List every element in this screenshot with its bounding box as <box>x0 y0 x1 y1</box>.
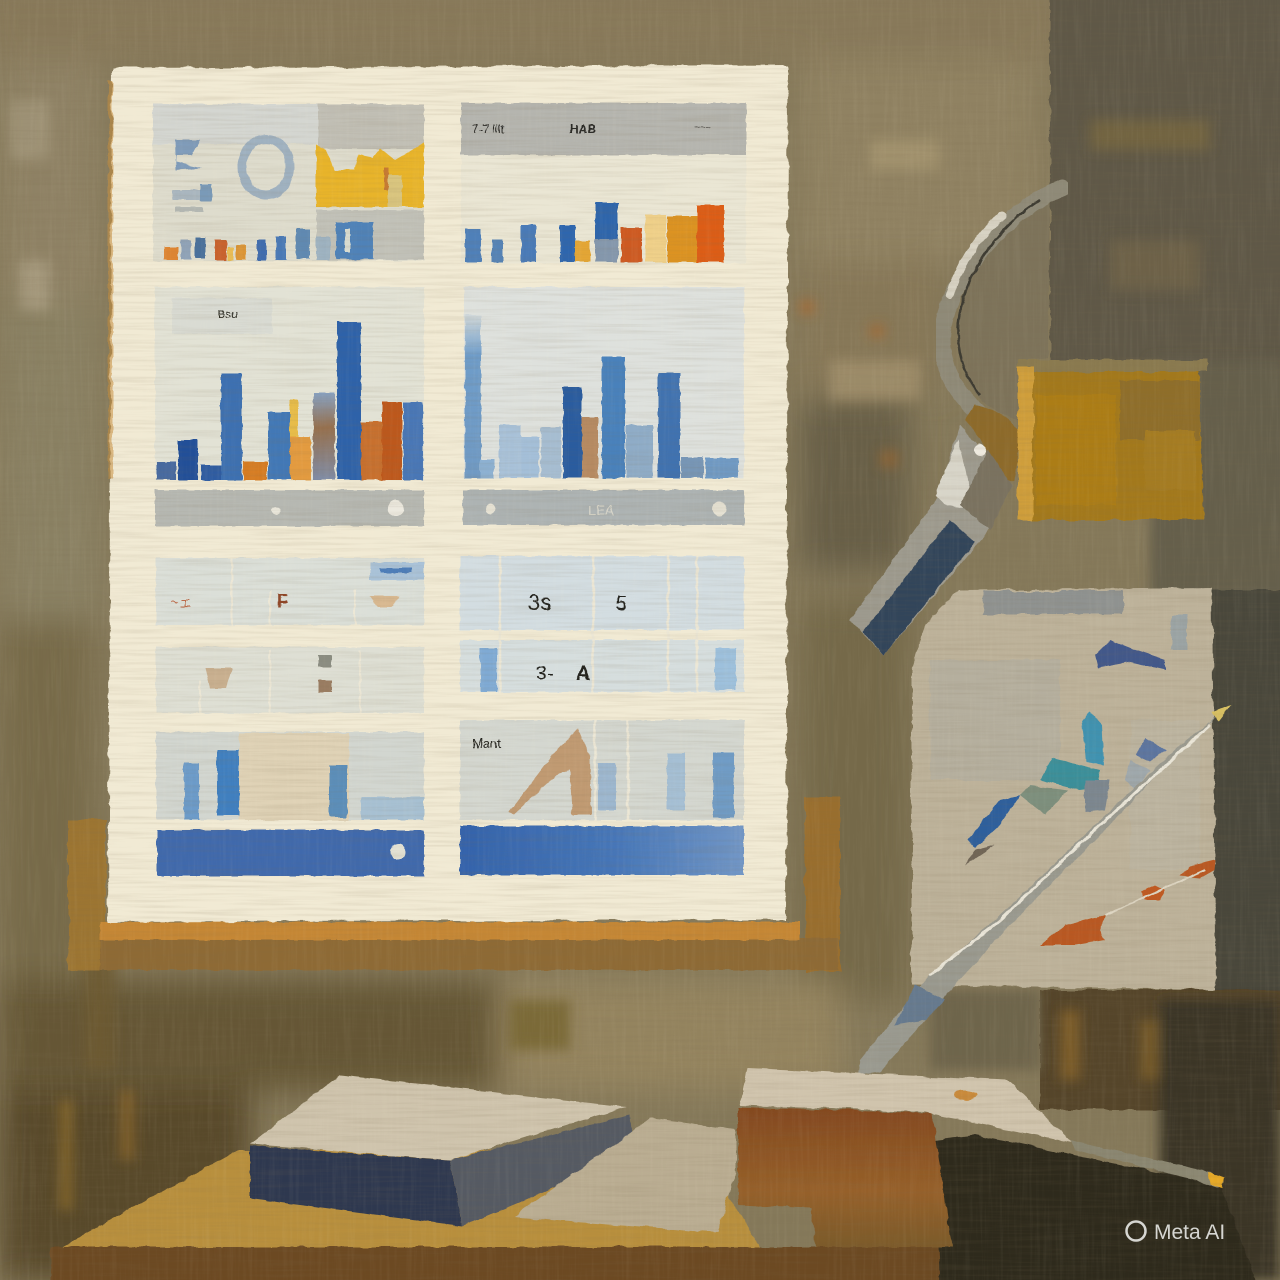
header labels: 7-7 lilt <box>472 122 505 136</box>
control bar left <box>155 490 424 526</box>
panel: lower right tables <box>460 556 744 820</box>
panel: mid left bar chart: Bsu <box>217 307 238 321</box>
magnifier handle <box>850 425 1012 655</box>
header strip <box>461 103 746 155</box>
blue footer right <box>460 826 744 875</box>
table labels: 3s <box>528 590 551 615</box>
book top <box>250 1075 626 1160</box>
yellow area chart <box>316 142 424 207</box>
panel: lower left tables: ~ェ <box>170 594 192 610</box>
blue glyph marks <box>175 140 202 170</box>
cup lid <box>740 1068 1072 1142</box>
panel: mid right bar chart <box>464 287 744 478</box>
lens <box>957 190 1060 420</box>
blue mark top <box>1095 640 1165 670</box>
table top <box>50 1150 1050 1280</box>
fine paintbrush <box>1070 1140 1224 1188</box>
long silver brush <box>858 704 1232 1075</box>
panel: mid left bar chart <box>155 287 424 480</box>
cream board <box>108 65 788 922</box>
panel: top right chart: HAB <box>570 122 596 136</box>
small bar chart <box>164 222 373 260</box>
side posts behind panel <box>68 797 840 972</box>
book front <box>250 1146 462 1226</box>
main dashboard panel <box>108 65 788 922</box>
paper marks and brushes <box>858 640 1232 1075</box>
panel: top right chart <box>461 103 746 263</box>
gold box <box>1018 360 1208 520</box>
dark shadow at right of table <box>935 1135 1260 1280</box>
bars <box>156 322 423 480</box>
panel: top left summary <box>153 104 424 261</box>
shelf <box>100 922 838 970</box>
loose paper <box>513 1118 736 1233</box>
gray side block <box>316 210 424 260</box>
teal glyph <box>965 712 1166 865</box>
panel: lower right tables: A <box>576 663 590 685</box>
right paper sheet <box>912 588 1216 990</box>
blue grip <box>863 520 975 655</box>
panel: lower right tables: 5 <box>616 593 627 615</box>
panel: lower left tables: F <box>277 591 288 611</box>
panel: lower right tables: 3- <box>536 663 554 685</box>
panel: lower left tables <box>156 558 424 820</box>
icon: ring gauge <box>242 139 290 195</box>
book <box>250 1075 634 1226</box>
cup body <box>738 1108 952 1247</box>
tan chart line <box>509 728 591 815</box>
panel: top right chart: ~~~ <box>695 122 711 132</box>
cup <box>738 1068 1072 1247</box>
lens rim <box>942 188 1062 412</box>
red brush <box>1040 860 1215 945</box>
label box <box>172 298 272 334</box>
magnifying glass <box>942 188 1062 481</box>
silver handle <box>850 425 1012 655</box>
control bar right: LEA <box>588 502 615 518</box>
bars <box>465 315 738 478</box>
book spine <box>450 1115 634 1226</box>
neck <box>965 405 1020 481</box>
rim highlight <box>950 216 1002 295</box>
control bar right <box>463 490 744 525</box>
blue footer left <box>157 830 424 876</box>
panel: lower right tables: Mant <box>472 736 501 751</box>
blue marks <box>184 763 199 820</box>
rim shadow <box>958 200 1040 395</box>
blue marks <box>480 648 497 692</box>
bar chart <box>465 203 724 262</box>
watermark: Meta AI: Meta AI <box>1154 1221 1225 1244</box>
tan wash <box>239 733 349 820</box>
